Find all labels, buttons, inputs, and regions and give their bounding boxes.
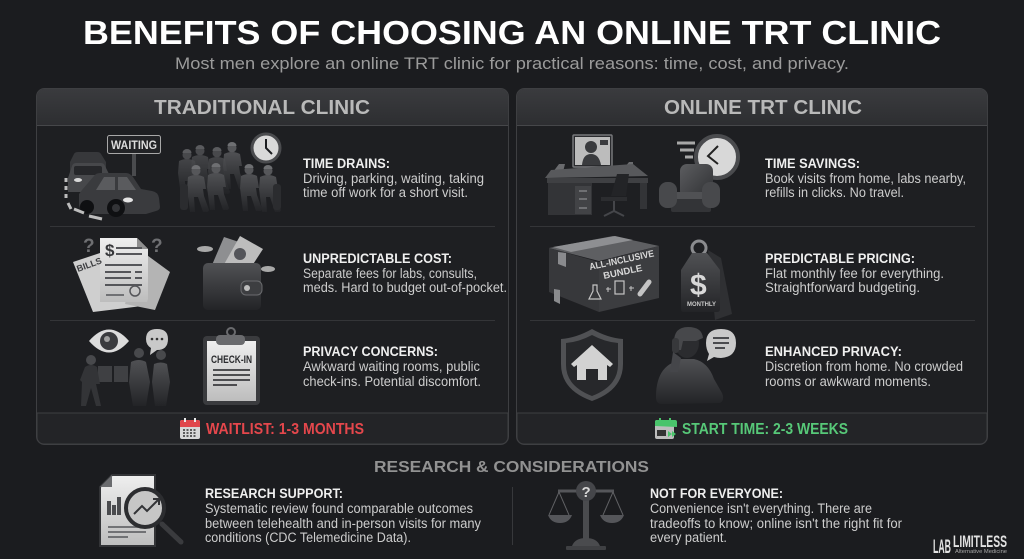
text: time drains: time off work for a short visit. [303, 185, 468, 200]
panel heading: online TRT clinic: ONLINE TRT CLINIC [664, 97, 862, 119]
text: unpredictable cost [303, 251, 507, 295]
text: time drains: Driving, parking, waiting, taking [303, 171, 484, 186]
text: predictable pricing [765, 251, 944, 295]
footer: start time: START TIME: 2-3 WEEKS [682, 421, 848, 438]
text: privacy concerns: Awkward waiting rooms, public [303, 359, 480, 374]
text: predictable pricing: PREDICTABLE PRICING: [765, 251, 915, 266]
text: unpredictable cost: meds. Hard to budget out-of-pocket. [303, 280, 507, 295]
icon: monthly price tag: $ [690, 269, 707, 302]
text: research support [205, 486, 481, 545]
footer: start time [517, 413, 987, 444]
text: not for everyone: Convenience isn't everything. There are [650, 501, 872, 516]
icon: crowded waiting room with clock [178, 134, 281, 212]
icon: monthly price tag [681, 241, 732, 320]
icon: stack of bills: $ [105, 241, 115, 260]
text: predictable pricing: Straightforward budgeting. [765, 280, 920, 295]
icon: stack of bills: BILLS [75, 256, 103, 274]
text: enhanced privacy: ENHANCED PRIVACY: [765, 344, 902, 359]
icon: wallet with cash [197, 236, 275, 310]
text: not for everyone: tradeoffs to know; online isn't the right fit for [650, 516, 902, 531]
icon: red calendar [180, 418, 200, 439]
text: research support: Systematic review found comparable outcomes [205, 501, 473, 516]
text: not for everyone [650, 486, 902, 545]
section heading: research and considerations: RESEARCH & CONSIDERATIONS [374, 459, 649, 476]
icon: stack of bills [73, 236, 170, 312]
icon: all-inclusive bundle box: ALL-INCLUSIVE [588, 248, 655, 273]
text: time savings: TIME SAVINGS: [765, 156, 860, 171]
panel heading: online TRT clinic [517, 89, 987, 125]
icon: balance scales with question mark [548, 481, 624, 550]
text: time savings [765, 156, 966, 200]
icon: cars waiting in traffic [66, 136, 160, 219]
panel heading: traditional clinic [37, 89, 508, 125]
logo: limitless alternative medicine: Alternative Medicine [955, 549, 1007, 555]
icon: balance scales with question mark: ? [582, 484, 591, 501]
logo: limitless alternative medicine [933, 532, 1007, 558]
text: not for everyone: NOT FOR EVERYONE: [650, 486, 783, 501]
icon: check-in clipboard [203, 328, 260, 405]
text: enhanced privacy [765, 344, 963, 389]
text: research support: RESEARCH SUPPORT: [205, 486, 343, 501]
icon: person on phone with chat bubble [656, 327, 736, 404]
panel heading: traditional clinic: TRADITIONAL CLINIC [154, 97, 370, 119]
text: not for everyone: every patient. [650, 530, 727, 545]
text: privacy concerns: PRIVACY CONCERNS: [303, 344, 438, 359]
text: enhanced privacy: Discretion from home. No crowded [765, 359, 963, 374]
subtitle: Most men explore an online TRT clinic for practical reasons: time, cost, and privacy. [175, 54, 849, 73]
text: privacy concerns [303, 344, 481, 389]
text: time savings: refills in clicks. No travel. [765, 185, 904, 200]
panel: traditional clinic [36, 88, 508, 444]
text: predictable pricing: Flat monthly fee for everything. [765, 266, 944, 281]
text: time drains: TIME DRAINS: [303, 156, 390, 171]
title: BENEFITS OF CHOOSING AN ONLINE TRT CLINIC [83, 14, 941, 51]
icon: clock and armchair [659, 136, 738, 212]
icon: green calendar [655, 418, 677, 439]
icon: all-inclusive bundle box [549, 236, 659, 312]
icon: monthly price tag: MONTHLY [687, 301, 717, 308]
text: enhanced privacy: rooms or awkward moments. [765, 374, 931, 389]
icon: stack of bills: ? [83, 236, 95, 257]
text: privacy concerns: check-ins. Potential discomfort. [303, 374, 481, 389]
icon: home desk with telehealth video call [545, 135, 648, 216]
text: unpredictable cost: UNPREDICTABLE COST: [303, 251, 452, 266]
icon: watching eye and exposed waiting area [80, 329, 170, 406]
text: research support: between telehealth and in-person visits for many [205, 516, 481, 531]
icon: home shield [561, 329, 623, 401]
text: unpredictable cost: Separate fees for labs, consults, [303, 266, 477, 281]
footer: waitlist: WAITLIST: 1-3 MONTHS [206, 421, 364, 438]
icon: check-in clipboard: CHECK-IN [211, 354, 252, 366]
logo: limitless alternative medicine: LAB [933, 537, 951, 558]
panel: online TRT clinic [516, 88, 988, 444]
icon: all-inclusive bundle box: BUNDLE [602, 263, 643, 282]
icon: research document with magnifier [100, 475, 181, 546]
text: time savings: Book visits from home, labs nearby, [765, 171, 966, 186]
text: time drains [303, 156, 484, 200]
footer: waitlist [37, 413, 508, 444]
text: research support: conditions (CDC Telemedicine Data). [205, 530, 411, 545]
icon: cars waiting in traffic: WAITING [111, 140, 157, 152]
icon: stack of bills: ? [151, 236, 163, 257]
